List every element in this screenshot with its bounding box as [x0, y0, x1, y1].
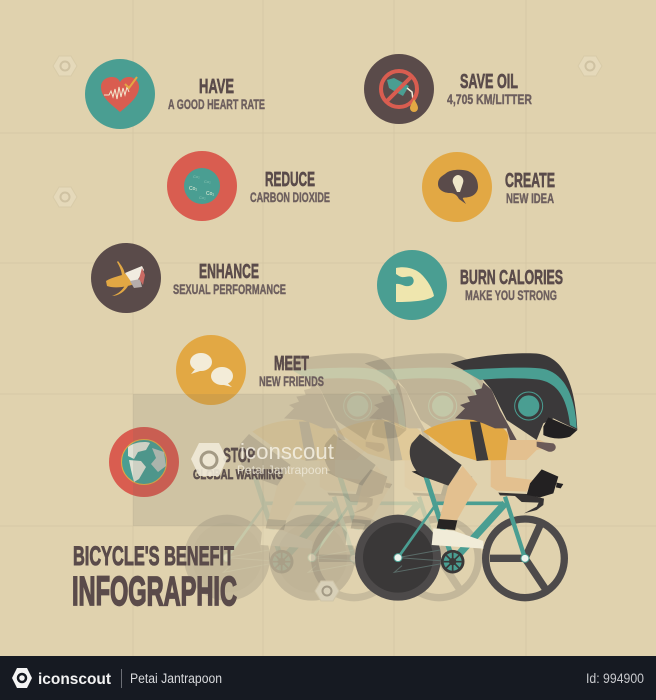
heading: save oil: SAVE OIL: [460, 71, 518, 93]
benefit: heart rate: [85, 59, 265, 129]
watermark icon: top left: [53, 56, 77, 76]
icon: speech bubbles: [176, 335, 246, 405]
heading: enhance: ENHANCE: [199, 261, 259, 283]
title: [72, 541, 237, 614]
icon: CO2: Co₂: [204, 179, 211, 184]
main cyclist: [355, 353, 577, 601]
ghost cyclist near: [269, 353, 491, 601]
bicycle frame: [394, 477, 529, 573]
icon: brain with bulb: [422, 152, 492, 222]
icon: CO2: [167, 151, 237, 221]
subheading: carbon dioxide: CARBON DIOXIDE: [250, 189, 330, 205]
icon: banana: [91, 243, 161, 313]
heading: stop: STOP: [223, 445, 255, 467]
icon: heart: [85, 59, 155, 129]
sock: [437, 519, 457, 530]
footer brand: iconscout: [38, 671, 112, 688]
jersey: [423, 420, 508, 461]
heading: meet: MEET: [274, 353, 309, 375]
title line one: BICYCLE'S BENEFIT: [73, 541, 234, 571]
subheading: sexual performance: SEXUAL PERFORMANCE: [173, 281, 286, 297]
icon: CO2: Co₂: [193, 174, 200, 179]
shoe: [432, 528, 483, 549]
footer bar: [0, 656, 656, 700]
hair: [455, 383, 517, 440]
beard: [537, 442, 556, 452]
aero handlebar: [498, 493, 544, 513]
arm: [491, 460, 533, 492]
heading: have: HAVE: [199, 76, 234, 98]
watermark icon: top right: [578, 56, 602, 76]
visor: [543, 417, 577, 438]
rear wheel: [355, 515, 441, 601]
title line two: INFOGRAPHIC: [72, 568, 237, 614]
benefit: global warming: [109, 427, 283, 497]
watermark icon: bottom: [315, 581, 339, 601]
heading: burn calories: BURN CALORIES: [460, 267, 563, 289]
watermark logo: [191, 443, 227, 476]
glove: [527, 469, 563, 497]
benefit: meet friends: [176, 335, 324, 405]
saddle: [412, 469, 438, 478]
icon: CO2: Co₂: [189, 186, 197, 192]
subheading: distance per litre: 4,705 KM/LITTER: [447, 91, 532, 107]
leg: [439, 466, 477, 521]
heading: create: CREATE: [505, 170, 555, 192]
benefit: sexual performance: [91, 243, 286, 313]
subheading: make you strong: MAKE YOU STRONG: [465, 287, 557, 303]
shorts: [410, 434, 462, 486]
heading: reduce: REDUCE: [265, 169, 315, 191]
watermark icon: middle left: [53, 187, 77, 207]
footer id: Id: 994900: [586, 671, 644, 686]
watermark text: author: Petai Jantrapoon: [237, 463, 328, 477]
icon: earth: [109, 427, 179, 497]
subheading: global warming: GLOBAL WARMING: [193, 466, 283, 482]
benefit: save oil: [364, 54, 532, 124]
icon: flexed arm: [377, 250, 447, 320]
watermark text: iconscout: iconscout: [240, 439, 334, 464]
icon: CO2: Co₂: [199, 195, 206, 200]
front wheel: [486, 519, 564, 598]
benefit: burn calories: [377, 250, 563, 320]
benefit: new idea: [422, 152, 555, 222]
footer author: Petai Jantrapoon: [130, 671, 222, 686]
icon: no oil: [364, 54, 434, 124]
helmet: [451, 353, 577, 440]
jersey strap: [470, 422, 488, 461]
footer logo: [12, 668, 32, 688]
subheading: new idea: NEW IDEA: [506, 190, 554, 206]
benefit: carbon dioxide: [167, 151, 330, 221]
watermark panel: [133, 394, 394, 526]
subheading: new friends: NEW FRIENDS: [259, 373, 324, 389]
ghost cyclist far: [184, 353, 406, 601]
subheading: a good heart rate: A GOOD HEART RATE: [168, 96, 265, 112]
icon: CO2: Co₂: [206, 191, 214, 197]
shoulder and neck skin: [506, 428, 553, 460]
footer divider: [121, 669, 122, 688]
